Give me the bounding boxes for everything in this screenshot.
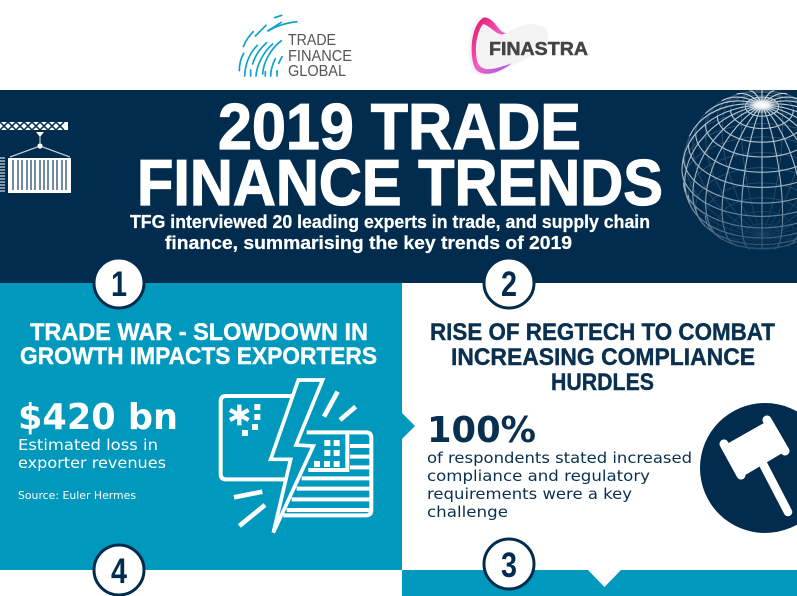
subtitle: finance, summarising the key trends of 2019 [165, 233, 572, 253]
text: respondents: compliance and regulatory [427, 467, 650, 485]
logo text: Trade Finance Global: TRADE [288, 32, 336, 49]
heading: regtech: HURDLES [551, 369, 654, 396]
logo text: Trade Finance Global: FINANCE [288, 48, 352, 65]
text: source: Source: Euler Hermes [18, 490, 136, 502]
logo: Trade Finance Global [239, 15, 356, 80]
text: estimated loss: exporter revenues [18, 454, 166, 472]
number badge 4: 4 [111, 552, 127, 591]
text: respondents: requirements were a key [427, 485, 632, 503]
heading: regtech: RISE OF REGTECH TO COMBAT [430, 319, 775, 346]
icon: crane and shipping container [0, 122, 71, 193]
statistic: 100%: 100% [427, 410, 536, 451]
number badge 2: 2 [501, 265, 517, 304]
heading: trade war: TRADE WAR - SLOWDOWN IN [30, 319, 368, 346]
icon: Finastra ribbon [469, 17, 548, 76]
icon: China and US flags split by lightning [221, 380, 371, 533]
number badge 2 [484, 258, 534, 308]
logo text: FINASTRA: FINASTRA [489, 38, 588, 59]
logo: Finastra [469, 17, 588, 76]
number badge 3 [484, 539, 534, 589]
text: respondents: of respondents stated increased [427, 449, 692, 467]
number badge 4 [94, 545, 144, 595]
statistic: $420 bn: $420 bn [18, 397, 178, 438]
title: 2019 TRADE [218, 90, 581, 163]
panel background and pointer arrow [0, 283, 415, 570]
banner background [0, 90, 797, 283]
icon: Trade Finance Global fan of arcs [239, 15, 297, 76]
text: estimated loss: Estimated loss in [18, 436, 158, 454]
subtitle: TFG interviewed 20 leading experts in trade, and supply chain [130, 212, 650, 232]
icon: gavel [700, 403, 797, 533]
heading: regtech: INCREASING COMPLIANCE [451, 344, 755, 371]
heading: trade war: GROWTH IMPACTS EXPORTERS [20, 343, 377, 370]
panel: trade war [0, 283, 415, 570]
logo text: Trade Finance Global: GLOBAL [288, 63, 346, 80]
panel: regtech bottom band [402, 570, 797, 596]
number badge 1: 1 [111, 265, 127, 304]
number badge 1 [94, 258, 144, 308]
title: FINANCE TRENDS [137, 146, 663, 219]
icon: wireframe globe [681, 90, 797, 250]
number badge 3: 3 [501, 546, 517, 585]
text: respondents: challenge [427, 503, 508, 521]
